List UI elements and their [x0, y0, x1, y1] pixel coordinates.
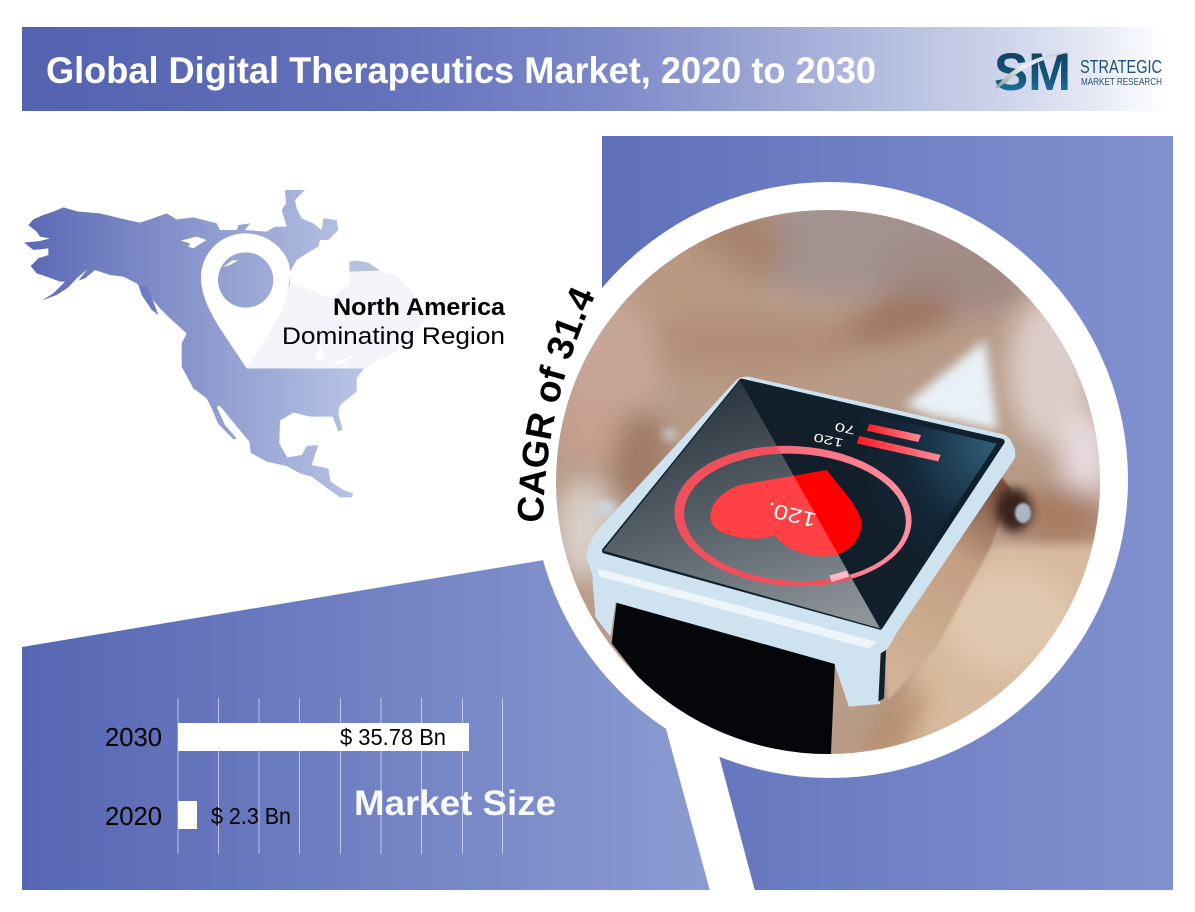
level bars: [867, 424, 921, 442]
map: northern island: [349, 261, 380, 272]
watch case: [587, 377, 1015, 706]
label: 2020: 2020: [105, 801, 162, 831]
bar: 2020: [178, 801, 197, 829]
logo: Strategic Market Research: [994, 43, 1162, 102]
logo: Strategic Market Research: SM: [994, 43, 1071, 102]
heart inside glare: [710, 476, 838, 556]
photo: smartwatch in magnifier: 120: [812, 430, 845, 450]
photo: case reflection: [883, 475, 1012, 700]
title: Global Digital Therapeutics Market, 2020 to 2030: [46, 50, 876, 91]
photo: shadow and wrist pin: [996, 488, 1032, 532]
watch side buttons: [595, 502, 615, 517]
magnifier handle: [665, 700, 755, 891]
photo background: [550, 205, 1110, 760]
chart gridlines: [178, 698, 502, 854]
text: North America Dominating Region: Dominating Region: [282, 323, 505, 350]
panel: market size background: [22, 544, 714, 890]
watch strap: [612, 602, 835, 760]
watch glare: [603, 381, 880, 628]
photo: wrist skin: [878, 540, 1093, 750]
panel: right blue background: [602, 136, 1173, 890]
reading: 120: 120.: [764, 497, 819, 531]
watch screen: [605, 382, 1002, 627]
label: 2030: 2030: [105, 722, 162, 752]
header banner: [22, 27, 1165, 111]
magnifier white ring: [532, 182, 1128, 778]
icon: location pin: [201, 233, 290, 368]
photo: smartwatch in magnifier: [550, 195, 1110, 765]
map: lakes: [181, 237, 357, 365]
map: islands: [138, 285, 158, 315]
text: North America Dominating Region: North America: [333, 294, 506, 321]
ring highlight: [829, 571, 849, 582]
logo: Strategic Market Research: STRATEGIC: [1080, 57, 1162, 77]
map: faded eastern Canada: [247, 272, 427, 368]
bar chart: market size: [105, 698, 556, 854]
heart icon: [710, 470, 861, 556]
case dark edge: [878, 650, 886, 702]
value: 35.78 Bn: $ 35.78 Bn: [340, 724, 446, 750]
curved text: CAGR of 31.4: CAGR of 31.4: [518, 288, 594, 521]
text: North America Dominating Region: [282, 294, 506, 350]
logo: Strategic Market Research: MARKET RESEARCH: [1081, 76, 1162, 88]
heart rate ring: [671, 440, 915, 592]
bar labels: 70: [833, 419, 857, 437]
photo: white background patch: [905, 340, 998, 430]
map landmass: [24, 190, 364, 497]
bar: 2030: [178, 723, 469, 751]
case lower band highlight: [597, 568, 877, 648]
heading: Market Size: Market Size: [354, 784, 556, 823]
ring segment inside glare: [674, 446, 852, 586]
map: North America: [24, 190, 427, 497]
value: 2.3 Bn: $ 2.3 Bn: [211, 803, 291, 829]
